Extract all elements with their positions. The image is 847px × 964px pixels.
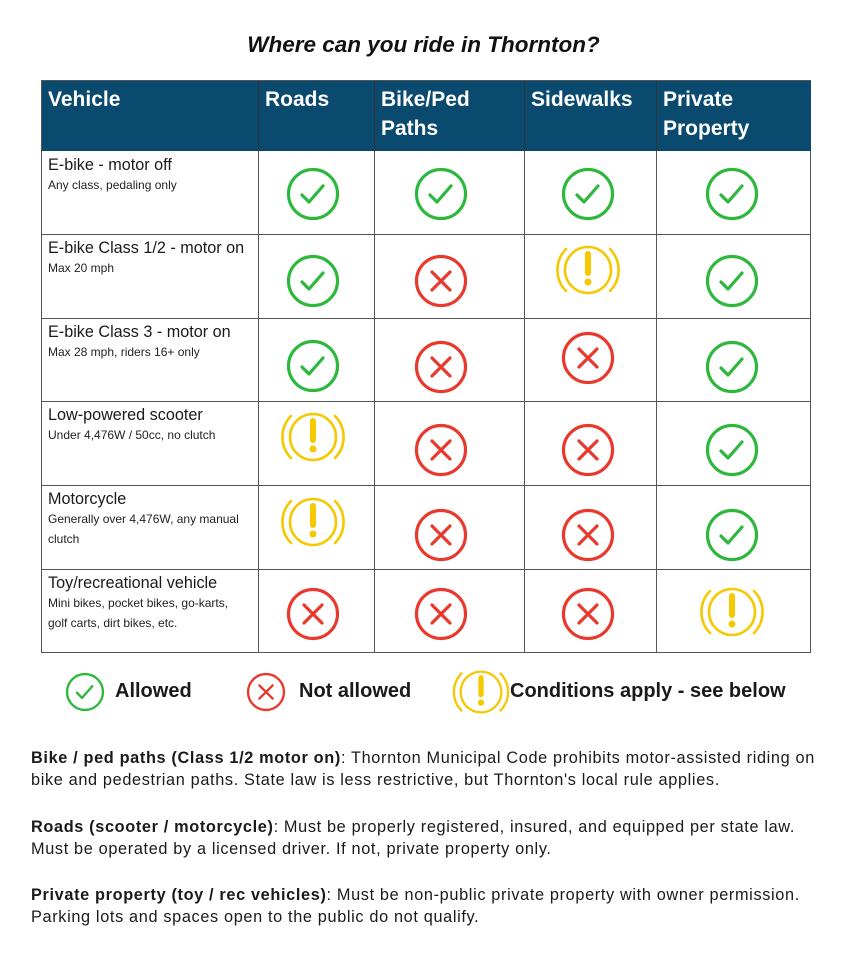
header: roads: Roads [265, 88, 329, 111]
row label: toy/recreational [48, 574, 228, 630]
row label: scooter: Under 4,476W / 50cc, no clutch [48, 428, 215, 442]
legend: Not allowed [299, 680, 411, 702]
header: private property [657, 81, 811, 151]
legend: Conditions apply - see below [510, 680, 786, 702]
header: bike/ped paths [375, 81, 525, 151]
row label: e-bike class 3: E-bike Class 3 - motor on [48, 323, 231, 341]
row label: scooter [48, 406, 215, 442]
header: vehicle [42, 81, 259, 151]
note: private property [31, 886, 800, 926]
note: roads [31, 818, 795, 858]
header: roads [259, 81, 375, 151]
note: bike/ped paths: Bike / ped paths (Class 1/2 motor on): Thornton Municipal Code prohibits motor-assisted riding on [31, 749, 815, 767]
row label: motorcycle [48, 490, 239, 546]
note: bike/ped paths: bike and pedestrian paths. State law is less restrictive, but Thornton's local rule applies. [31, 771, 720, 789]
legend: Allowed [115, 680, 192, 702]
row label: e-bike class 3 [48, 323, 231, 359]
header: bike/ped paths: Paths [381, 117, 438, 140]
header: sidewalks: Sidewalks [531, 88, 633, 111]
legend [66, 670, 786, 714]
row label: toy/recreational: Toy/recreational vehicle [48, 574, 217, 592]
title: Where can you ride in Thornton? [247, 32, 600, 57]
row label: e-bike motor off [48, 156, 177, 192]
row label: e-bike class 3: Max 28 mph, riders 16+ only [48, 345, 200, 359]
note: roads: Must be operated by a licensed driver. If not, private property only. [31, 840, 552, 858]
row label: e-bike class 1/2 [48, 239, 244, 275]
row label: motorcycle: Motorcycle [48, 490, 126, 508]
header: bike/ped paths: Bike/Ped [381, 88, 470, 111]
icons grid [281, 168, 764, 640]
row label: e-bike class 1/2: Max 20 mph [48, 261, 114, 275]
header: sidewalks [525, 81, 657, 151]
header: private property: Private [663, 88, 733, 111]
row label: toy/recreational: Mini bikes, pocket bikes, go-karts, [48, 596, 228, 610]
table [41, 80, 811, 653]
note: private property: Private property (toy / rec vehicles): Must be non-public private property with owner permission. [31, 886, 800, 904]
row label: e-bike motor off: E-bike - motor off [48, 156, 172, 174]
note: private property: Parking lots and spaces open to the public do not qualify. [31, 908, 479, 926]
row label: e-bike motor off: Any class, pedaling only [48, 178, 177, 192]
row label: e-bike class 1/2: E-bike Class 1/2 - motor on [48, 239, 244, 257]
note: bike/ped paths [31, 749, 815, 789]
header: vehicle: Vehicle [48, 88, 120, 111]
note: roads: Roads (scooter / motorcycle): Must be properly registered, insured, and equipped per state law. [31, 818, 795, 836]
header: private property: Property [663, 117, 749, 140]
row label: toy/recreational: golf carts, dirt bikes, etc. [48, 616, 177, 630]
row label: scooter: Low-powered scooter [48, 406, 203, 424]
row label: motorcycle: Generally over 4,476W, any manual [48, 512, 239, 526]
row label: motorcycle: clutch [48, 532, 79, 546]
